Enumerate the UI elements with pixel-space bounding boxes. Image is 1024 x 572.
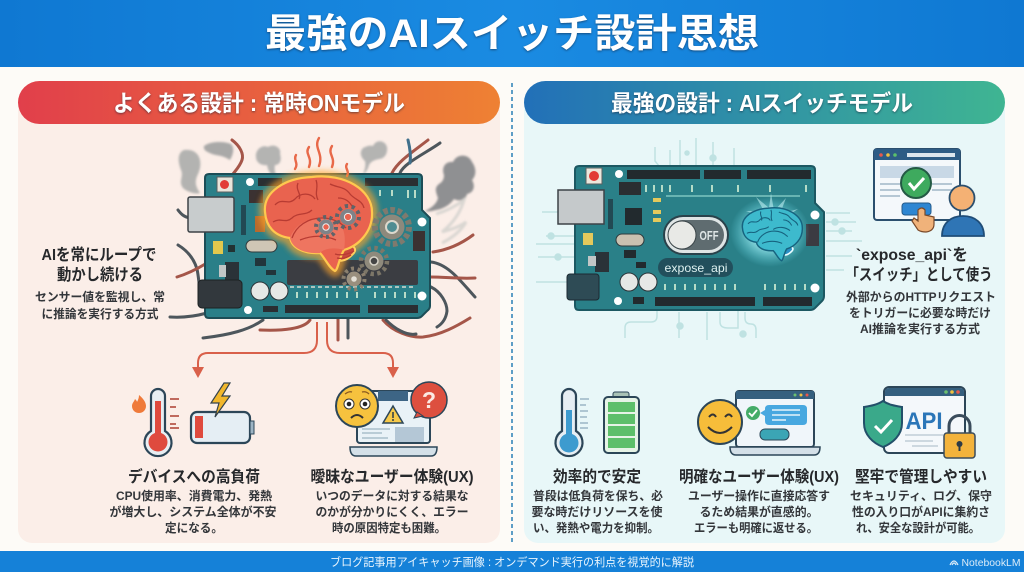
text: ambiguous user experience: のかが分かりにくく、エラー xyxy=(316,504,468,519)
toggle switch: OFF xyxy=(700,229,719,243)
header banner xyxy=(0,0,1024,67)
text: efficient and stable: 効率的で安定 xyxy=(553,467,641,486)
arrowhead: left xyxy=(192,367,204,378)
text: robust and manageable: 堅牢で管理しやすい xyxy=(855,467,987,486)
glowing brain xyxy=(730,193,810,267)
text: high device load: CPU使用率、消費電力、発熱 xyxy=(116,488,272,503)
text: expose_api as switch: をトリガーに必要な時だけ xyxy=(849,305,991,320)
illustration: overheating circuit board xyxy=(170,138,475,340)
arrowhead: right xyxy=(387,367,399,378)
label: expose_api: expose_api xyxy=(664,261,728,275)
icon: cool thermometer and full battery xyxy=(556,389,639,456)
text: always-on description: に推論を実行する方式 xyxy=(42,306,158,321)
text: robust and manageable: セキュリティ、ログ、保守 xyxy=(850,488,992,503)
text: efficient and stable: 普段は低負荷を保ち、必 xyxy=(533,488,663,503)
icon: happy face and laptop xyxy=(698,391,820,455)
icon: confused face and laptop: ? xyxy=(422,387,436,413)
title: 最強のAIスイッチ設計思想 xyxy=(265,12,759,56)
text: expose_api as switch: 外部からのHTTPリクエスト xyxy=(846,289,996,304)
faint circuit traces xyxy=(536,138,862,340)
panel heading: AI switch: 最強の設計 : AIスイッチモデル xyxy=(611,90,913,116)
text: clear user experience: エラーも明確に返せる。 xyxy=(694,520,818,535)
panel: common design, always-on model xyxy=(18,81,500,543)
text: clear user experience xyxy=(679,467,839,535)
illustration: circuit board with switch xyxy=(536,138,862,340)
panel heading: AI switch xyxy=(524,81,1005,124)
wires xyxy=(170,140,475,340)
text: ambiguous user experience: 曖昧なユーザー体験(UX) xyxy=(310,468,474,486)
text: efficient and stable xyxy=(532,467,663,535)
text: always-on description xyxy=(35,246,165,321)
text: robust and manageable xyxy=(850,467,992,535)
text: high device load xyxy=(110,467,276,535)
text: efficient and stable: い、発熱や電力を抑制。 xyxy=(533,520,659,535)
gears xyxy=(316,206,409,290)
text: ambiguous user experience: いつのデータに対する結果な xyxy=(316,488,468,503)
text: robust and manageable: れ、安全な設計が可能。 xyxy=(856,520,980,535)
text: ambiguous user experience: 時の原因特定も困難。 xyxy=(332,520,446,535)
text: clear user experience: 明確なユーザー体験(UX) xyxy=(679,467,839,486)
footer caption: ブログ記事用アイキャッチ画像 : オンデマンド実行の利点を視覚的に解説 xyxy=(330,555,694,569)
panel heading: always-on: よくある設計 : 常時ONモデル xyxy=(113,90,405,116)
footer bar xyxy=(0,551,1024,572)
text: high device load: デバイスへの高負荷 xyxy=(128,467,260,486)
text: expose_api as switch xyxy=(846,246,996,336)
icon: web window and user xyxy=(874,149,984,236)
icon: hot thermometer and low battery xyxy=(132,383,254,456)
icon: confused face and laptop xyxy=(336,382,447,456)
text: efficient and stable: 要な時だけリソースを使 xyxy=(532,504,662,519)
text: expose_api as switch: `expose_api`を xyxy=(856,246,968,264)
icon: shield, API window and padlock: API xyxy=(906,408,942,435)
icon: shield, API window and padlock xyxy=(864,387,975,458)
board components xyxy=(188,177,426,314)
board xyxy=(205,174,430,318)
board components xyxy=(558,168,820,306)
text: clear user experience: ユーザー操作に直接応答す xyxy=(688,488,830,503)
text: expose_api as switch: AI推論を実行する方式 xyxy=(860,321,980,336)
text: high device load: 定になる。 xyxy=(165,521,223,535)
glowing brain xyxy=(265,176,372,271)
smoke xyxy=(179,141,475,243)
heat flames xyxy=(295,138,348,176)
text: high device load: が増大し、システム全体が不安 xyxy=(110,504,276,519)
panel heading: always-on xyxy=(18,81,500,124)
text: always-on description: 動かし続ける xyxy=(57,266,143,284)
text: expose_api as switch: 「スイッチ」として使う xyxy=(846,266,992,284)
board xyxy=(575,166,824,310)
arrow: to high device load xyxy=(198,322,317,368)
text: ambiguous user experience xyxy=(310,468,474,535)
text: clear user experience: るため結果が直感的。 xyxy=(700,504,818,519)
toggle switch xyxy=(664,216,728,254)
text: always-on description: センサー値を監視し、常 xyxy=(35,289,165,304)
text: always-on description: AIを常にループで xyxy=(42,246,156,264)
notebooklm credit: NotebookLM xyxy=(962,557,1020,569)
center divider xyxy=(511,83,513,545)
label: expose_api xyxy=(658,258,733,277)
text: robust and manageable: 性の入り口がAPIに集約さ xyxy=(852,504,990,519)
panel: strongest design, AI switch model xyxy=(524,81,1005,543)
arrow: to ambiguous UX xyxy=(327,322,393,368)
